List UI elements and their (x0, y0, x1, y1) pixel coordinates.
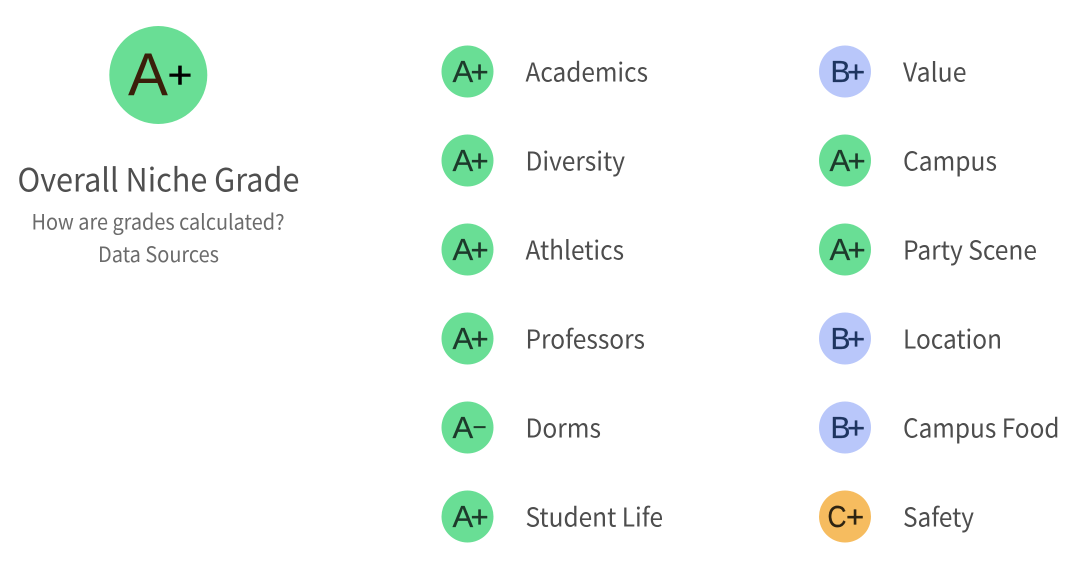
row: professors: Professors (526, 320, 645, 356)
row: campus: Campus (903, 142, 997, 178)
row: campus: A (830, 143, 850, 178)
row: location: + (847, 321, 865, 356)
row: student life: + (470, 499, 489, 534)
panel: right grades column (819, 46, 1060, 542)
link: data sources: Data Sources (98, 239, 219, 269)
row: dorms (442, 402, 601, 454)
row: athletics: + (470, 232, 489, 267)
row: party scene: + (848, 232, 866, 267)
row: academics: + (470, 54, 489, 89)
row: athletics (442, 224, 624, 276)
row: athletics: A (452, 232, 474, 267)
row: safety: C (828, 499, 846, 534)
row: academics: A (452, 54, 474, 89)
row: value: B (830, 54, 850, 89)
row: dorms: − (472, 414, 487, 441)
row: safety (819, 490, 974, 542)
row: party scene: A (830, 232, 850, 267)
row: value (819, 46, 966, 98)
row: party scene (819, 224, 1037, 276)
row: campus food: B (830, 410, 850, 445)
link: how are grades calculated: How are grades calculated? (32, 206, 284, 236)
row: dorms: A (452, 410, 474, 445)
row: student life: A (452, 499, 474, 534)
row: professors: A (452, 321, 474, 356)
row: location (819, 312, 1002, 364)
panel: left grades column (442, 46, 663, 542)
row: campus (819, 134, 997, 186)
row: safety: Safety (903, 498, 974, 534)
row: value: + (847, 54, 865, 89)
row: academics (442, 46, 648, 98)
row: campus: + (848, 143, 866, 178)
row: party scene: Party Scene (903, 230, 1037, 268)
row: diversity: A (452, 143, 474, 178)
row: campus food: Campus Food (903, 408, 1060, 446)
row: dorms: Dorms (526, 408, 601, 446)
icon: overall A+ badge: + (168, 55, 192, 97)
row: professors: + (470, 321, 489, 356)
row: diversity: Diversity (526, 142, 625, 178)
row: campus food: + (847, 410, 865, 445)
row: value: Value (903, 52, 966, 90)
row: location: B (830, 321, 850, 356)
row: campus food (819, 402, 1060, 454)
icon: overall A+ badge (109, 26, 207, 124)
row: student life (442, 490, 663, 542)
row: student life: Student Life (526, 498, 663, 534)
icon: overall A+ badge: A (128, 41, 168, 108)
row: safety: + (846, 499, 864, 534)
row: academics: Academics (526, 52, 648, 90)
row: location: Location (903, 320, 1002, 356)
row: diversity (442, 134, 625, 186)
panel: overall grade (18, 26, 300, 269)
row: diversity: + (470, 143, 489, 178)
row: athletics: Athletics (526, 230, 624, 268)
heading: overall niche grade: Overall Niche Grade (18, 156, 300, 202)
row: professors (442, 312, 645, 364)
